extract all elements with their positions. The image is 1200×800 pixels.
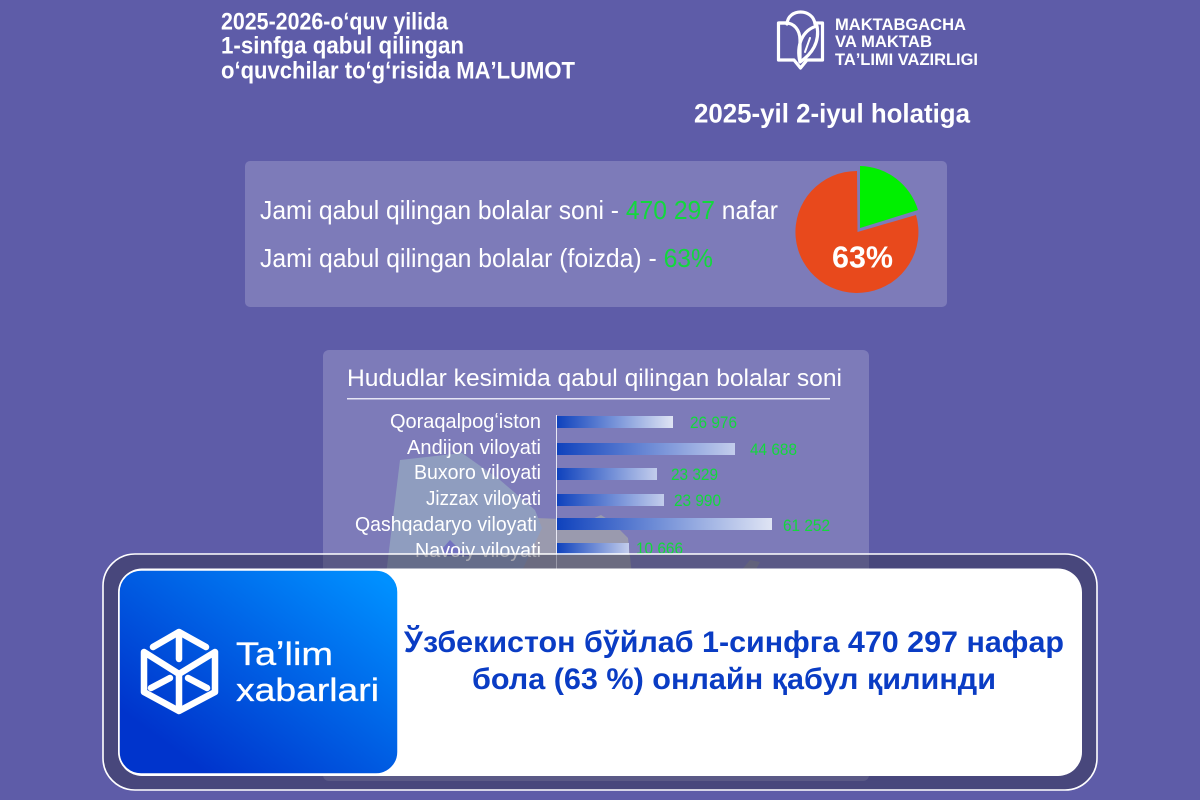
map silhouette [386,453,760,590]
bar chart: Jizzax viloyati [426,487,541,510]
bar chart: Andijon viloyati [407,436,541,459]
ministry name: VA MAKTAB [835,32,932,51]
bar chart: Qoraqalpogʻiston [390,410,541,433]
ministry name: TAʼLIMI VAZIRLIGI [835,50,978,69]
title: 2025-2026-oʻquv yilida [221,8,449,36]
bar chart [355,410,830,585]
bar chart: 23 329 [671,465,718,484]
date: 2025-yil 2-iyul holatiga [694,98,971,128]
news banner [103,554,1097,790]
title: 1-sinfga qabul qilingan [221,32,464,60]
banner frame [103,554,1097,790]
white card [118,568,1082,776]
percent line: Jami qabul qilingan bolalar (foizda) - 63% [260,243,713,273]
bar chart: 10 666 [636,539,683,558]
blue logo block: xabarlari [236,672,379,708]
icon: cube logo [144,632,215,711]
icon: ministry book logo [778,12,822,68]
bar chart: 44 688 [750,440,797,459]
bar chart: Buxoro viloyati [414,461,541,484]
title [221,8,575,84]
headline: бола (63 %) онлайн қабул қилинди [472,663,996,696]
panel: regions [323,350,869,781]
bar chart: Navoiy viloyati [415,539,541,562]
ministry name [835,15,978,69]
headline [403,625,1064,696]
bar chart: 23 990 [674,491,721,510]
title: oʻquvchilar toʻgʻrisida MAʼLUMOT [221,58,575,84]
bar chart: 61 252 [783,516,830,535]
brand name: Taʼlim [236,636,333,672]
total count line: Jami qabul qilingan bolalar soni - 470 297 nafar [260,195,778,225]
bar chart: 26 976 [690,413,737,432]
blue logo block [119,570,398,774]
ministry name: MAKTABGACHA [835,15,966,34]
panel: totals [245,161,947,307]
bar chart: Qashqadaryo viloyati [355,513,537,536]
headline: Ўзбекистон бўйлаб 1-синфга 470 297 нафар [403,625,1064,659]
pie chart [795,166,918,293]
pie chart: 63% [832,240,893,274]
chart title: Hududlar kesimida qabul qilingan bolalar soni [347,365,842,392]
